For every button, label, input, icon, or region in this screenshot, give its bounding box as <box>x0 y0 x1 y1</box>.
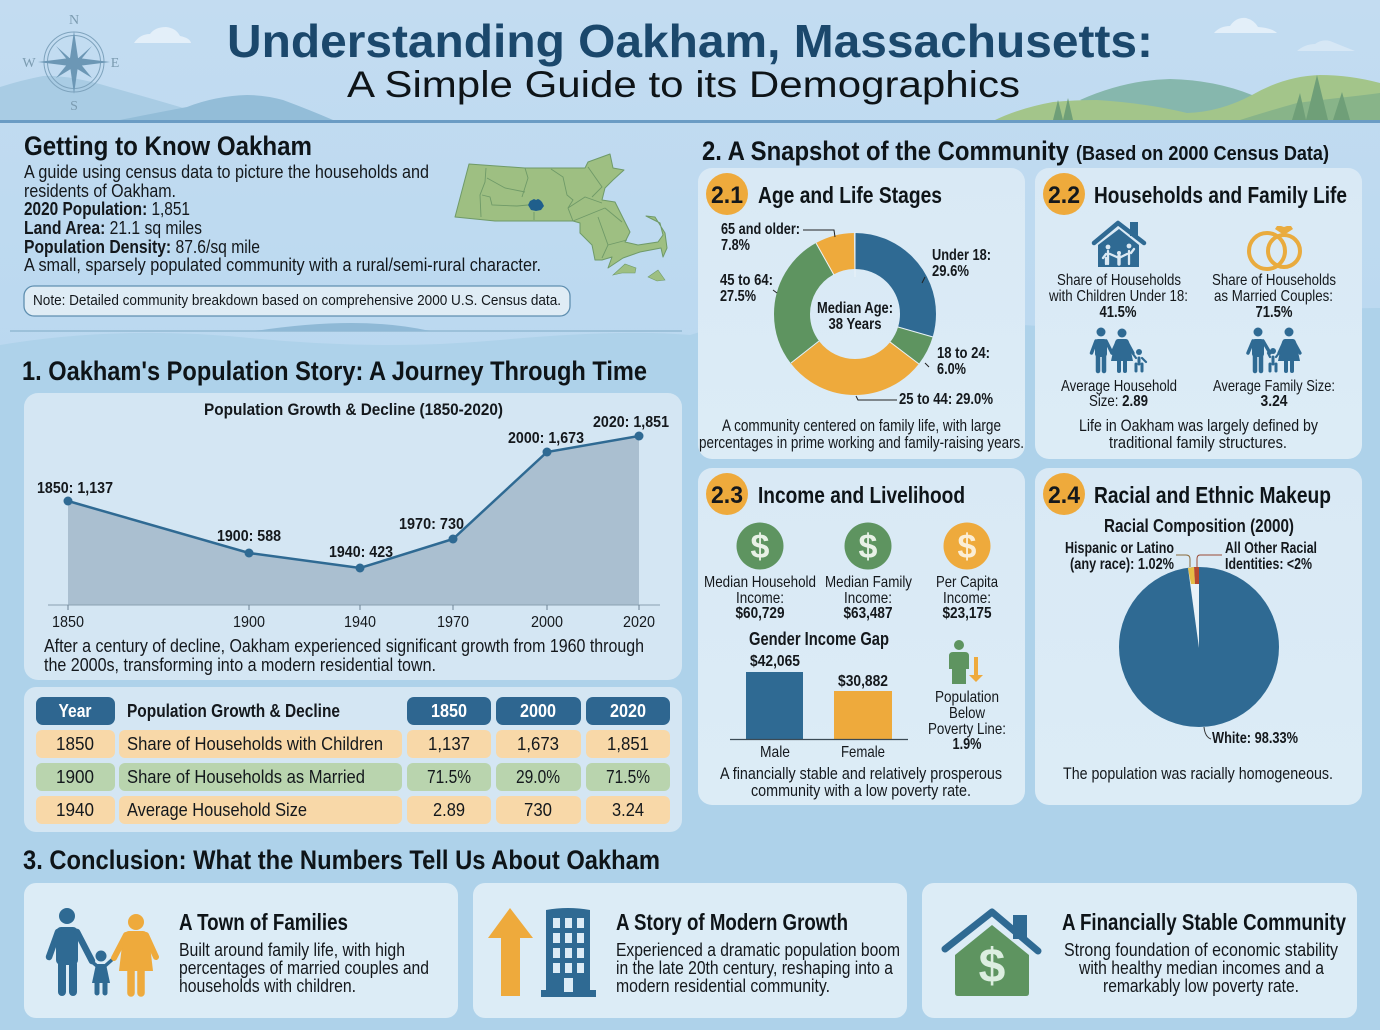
donut chart: age groups: 25 to 44: 29.0% <box>899 391 993 408</box>
area line chart: 2020: 1,851 <box>593 414 669 431</box>
table row 1940 <box>36 796 670 824</box>
badge 2.1 <box>706 173 748 215</box>
bar chart: gender income gap: $42,065 <box>750 653 800 670</box>
icon: compass rose: E <box>111 56 119 71</box>
donut chart: age groups <box>720 221 993 408</box>
badge 2.4: 2.4 <box>1048 482 1081 509</box>
table row 1900: 29.0% <box>516 767 560 787</box>
caption: A community centered on family life, with large <box>722 416 1001 435</box>
donut chart: age groups: 18 to 24: <box>937 345 990 362</box>
note callout: Note: Detailed community breakdown based on comprehensive 2000 U.S. Census data. <box>33 292 561 309</box>
icon: arrow up <box>488 908 533 996</box>
card: a financially stable community <box>922 883 1357 1018</box>
panel 2.3: income and livelihood <box>698 468 1025 805</box>
table row 1850: 1,851 <box>607 734 649 754</box>
section heading: conclusion: 3. Conclusion: What the Numbers Tell Us About Oakham <box>23 845 660 875</box>
panel: getting to know Oakham <box>24 131 667 316</box>
stat: per capita income: Income: <box>943 590 991 607</box>
area line chart: 1900: 588 <box>217 528 281 545</box>
chart caption <box>44 635 644 675</box>
table row 1850: Share of Households with Children <box>127 734 383 754</box>
bar chart: gender income gap: Male <box>760 744 790 761</box>
panel: data table <box>24 687 682 832</box>
icon: building <box>541 908 596 997</box>
pie chart: racial composition: Racial Composition (2000) <box>1104 516 1294 536</box>
table header <box>36 697 670 725</box>
pie chart: racial composition: Identities: <2% <box>1225 556 1312 573</box>
stat: households with children: 41.5% <box>1100 304 1136 321</box>
chart caption: the 2000s, transforming into a modern residential town. <box>44 654 436 675</box>
text block: overview: 2020 Population: 1,851 <box>24 198 190 219</box>
table row 1900 <box>36 763 670 791</box>
caption: The population was racially homogeneous. <box>1063 764 1333 783</box>
icon: compass rose: W <box>22 56 36 71</box>
table header: 2020 <box>610 701 646 721</box>
stat: per capita income <box>936 522 998 622</box>
table row 1940: Average Household Size <box>127 800 307 820</box>
stat: median family income: $63,487 <box>844 605 893 622</box>
area line chart: 2000: 1,673 <box>508 430 584 447</box>
donut chart: age groups: 45 to 64: <box>720 272 773 289</box>
stat: household size <box>1061 378 1177 410</box>
text block: Built around family life, with high <box>179 940 405 960</box>
text block: overview: Population Density: 87.6/sq mile <box>24 236 260 257</box>
table header: 1850 <box>431 701 467 721</box>
donut chart: age groups: 65 and older: <box>721 221 800 238</box>
stat: median family income <box>825 522 912 622</box>
caption: Life in Oakham was largely defined by <box>1079 416 1318 435</box>
table header: 2000 <box>520 701 556 721</box>
donut chart: age groups: Median Age: <box>817 300 893 317</box>
caption: percentages in prime working and family-raising years. <box>699 433 1024 452</box>
area line chart <box>37 414 669 631</box>
stat: median household income: Median Household <box>704 574 816 591</box>
badge 2.1: 2.1 <box>711 182 743 209</box>
badge 2.4 <box>1043 473 1085 515</box>
heading: A Story of Modern Growth <box>616 909 848 935</box>
text block: with healthy median incomes and a <box>1078 958 1325 978</box>
icon: compass rose <box>22 13 119 114</box>
caption: A financially stable and relatively prosperous <box>720 764 1002 783</box>
stat: households with children: with Children Under 18: <box>1048 288 1188 305</box>
note callout <box>24 286 570 316</box>
bar chart: gender income gap <box>730 629 908 761</box>
table row 1900: 1900 <box>56 767 94 787</box>
stat: poverty line: 1.9% <box>952 736 982 753</box>
bar chart: gender income gap: Gender Income Gap <box>749 629 889 649</box>
section heading: population story: 1. Oakham's Population Story: A Journey Through Time <box>22 356 647 386</box>
section heading: snapshot: (Based on 2000 Census Data) <box>1076 143 1329 165</box>
donut chart: age groups: 38 Years <box>828 316 882 333</box>
stat: family size: 3.24 <box>1260 393 1288 410</box>
badge 2.3 <box>706 473 748 515</box>
table row 1900: 71.5% <box>606 767 650 787</box>
stat: median household income: Income: <box>736 590 784 607</box>
table row 1940: 2.89 <box>433 800 465 820</box>
section heading: snapshot <box>702 136 1329 166</box>
stat: married couples: 71.5% <box>1256 304 1292 321</box>
area line chart: 2020 <box>623 614 655 631</box>
text block: overview <box>24 161 541 275</box>
donut chart: age groups: 7.8% <box>721 237 750 254</box>
caption: community with a low poverty rate. <box>751 781 971 800</box>
stat: median family income: Median Family <box>825 574 912 591</box>
area line chart: 1850: 1,137 <box>37 480 113 497</box>
badge 2.3: 2.3 <box>711 482 743 509</box>
stat: married couples: as Married Couples: <box>1214 288 1333 305</box>
stat: households with children <box>1048 272 1188 321</box>
panel 2.2: households and family life <box>1035 168 1362 459</box>
text block <box>616 940 900 996</box>
hills right <box>995 75 1380 120</box>
pie chart: racial composition: Hispanic or Latino <box>1065 540 1174 557</box>
icon: family of three <box>1092 328 1146 371</box>
text block: Strong foundation of economic stability <box>1064 940 1338 960</box>
header banner <box>0 18 1380 123</box>
text block: percentages of married couples and <box>179 958 429 978</box>
pie chart: racial composition: All Other Racial <box>1225 540 1317 557</box>
area line chart: 1940 <box>344 614 376 631</box>
stat: married couples <box>1212 272 1336 321</box>
donut chart: age groups: 29.6% <box>932 263 969 280</box>
caption: traditional family structures. <box>1109 433 1287 452</box>
text block <box>1064 940 1338 996</box>
table row 1940: 1940 <box>56 800 94 820</box>
stat: family size: Average Family Size: <box>1213 378 1335 395</box>
mountains left <box>0 76 333 120</box>
icon: house with family <box>1094 222 1144 267</box>
stat: married couples: Share of Households <box>1212 272 1336 289</box>
panel 2.4: racial and ethnic makeup <box>1035 468 1362 805</box>
text block <box>179 940 429 996</box>
area line chart: 1970: 730 <box>399 516 464 533</box>
icon: house with dollar: $ <box>979 940 1006 993</box>
card: a town of families <box>24 883 458 1018</box>
stat: family size <box>1213 378 1335 410</box>
map: Massachusetts <box>455 154 667 281</box>
title: Understanding Oakham, Massachusetts: <box>227 15 1153 67</box>
icon: wedding rings <box>1249 226 1300 269</box>
stat: median household income: $60,729 <box>736 605 785 622</box>
table row 1940: 730 <box>524 800 552 820</box>
bar chart: gender income gap: $30,882 <box>838 673 888 690</box>
badge 2.2 <box>1043 173 1085 215</box>
pie chart: racial composition <box>1065 516 1317 747</box>
table row 1850: 1850 <box>56 734 94 754</box>
text block: remarkably low poverty rate. <box>1103 976 1299 996</box>
donut chart: age groups: Under 18: <box>932 247 991 264</box>
panel: population line chart <box>24 393 682 680</box>
table header: Population Growth & Decline <box>127 701 340 721</box>
stat: median family income: Income: <box>844 590 892 607</box>
text block: in the late 20th century, reshaping into a <box>616 958 894 978</box>
stat: median household income: $ <box>751 528 770 566</box>
heading: A Town of Families <box>179 909 348 935</box>
table row 1900: 71.5% <box>427 767 471 787</box>
icon: compass rose: N <box>69 13 79 28</box>
clouds <box>134 18 1355 51</box>
stat: median household income <box>704 522 816 622</box>
text block: overview: residents of Oakham. <box>24 180 176 201</box>
text block: households with children. <box>179 976 356 996</box>
stat: household size: Size: 2.89 <box>1089 393 1148 410</box>
area line chart: 1900 <box>233 614 265 631</box>
heading: Age and Life Stages <box>758 182 942 208</box>
donut chart: age groups: 27.5% <box>720 288 756 305</box>
stat: poverty line: Population <box>935 689 999 706</box>
caption <box>699 416 1024 452</box>
text block: overview: A guide using census data to picture the households and <box>24 161 429 182</box>
title: A Simple Guide to its Demographics <box>347 64 1020 105</box>
table row 1850: 1,673 <box>517 734 559 754</box>
donut chart: age groups: 6.0% <box>937 361 966 378</box>
pie chart: racial composition: White: 98.33% <box>1212 730 1298 747</box>
text block: Experienced a dramatic population boom <box>616 940 900 960</box>
badge 2.2: 2.2 <box>1048 182 1080 209</box>
card: a story of modern growth <box>473 883 907 1018</box>
chart caption: After a century of decline, Oakham experienced significant growth from 1960 through <box>44 635 644 656</box>
pie chart: racial composition: (any race): 1.02% <box>1070 556 1174 573</box>
table header: Year <box>58 701 92 721</box>
text block: overview: A small, sparsely populated community with a rural/semi-rural character. <box>24 254 541 275</box>
heading: Getting to Know Oakham <box>24 131 312 161</box>
caption <box>1079 416 1318 452</box>
caption <box>720 764 1002 800</box>
stat: households with children: Share of Households <box>1057 272 1181 289</box>
icon: house with dollar <box>945 912 1038 996</box>
section heading: snapshot: 2. A Snapshot of the Community <box>702 136 1069 166</box>
stat: poverty line: Below <box>949 705 985 722</box>
stat: median family income: $ <box>859 528 878 566</box>
icon: family <box>49 908 156 993</box>
text block: modern residential community. <box>616 976 830 996</box>
stat: household size: Average Household <box>1061 378 1177 395</box>
table row 1900: Share of Households as Married <box>127 767 365 787</box>
panel 2.1: age and life stages <box>698 168 1025 459</box>
stat: per capita income: $23,175 <box>942 605 992 622</box>
stat: per capita income: $ <box>958 528 977 566</box>
area line chart: 2000 <box>531 614 563 631</box>
area line chart: 1850 <box>52 614 84 631</box>
area line chart: 1940: 423 <box>329 544 393 561</box>
chart title: Population Growth & Decline (1850-2020) <box>204 400 503 419</box>
bar chart: gender income gap: Female <box>841 744 885 761</box>
stat: poverty line <box>928 640 1006 753</box>
area line chart: 1970 <box>437 614 469 631</box>
stat: poverty line: Poverty Line: <box>928 721 1006 738</box>
table row 1940: 3.24 <box>612 800 644 820</box>
heading: Income and Livelihood <box>758 482 965 508</box>
icon: family size <box>1248 328 1300 371</box>
icon: compass rose: S <box>70 99 78 114</box>
table row 1850 <box>36 730 670 758</box>
table row 1850: 1,137 <box>428 734 470 754</box>
stat: per capita income: Per Capita <box>936 574 998 591</box>
text block: overview: Land Area: 21.1 sq miles <box>24 217 202 238</box>
title <box>227 15 1153 105</box>
heading: Racial and Ethnic Makeup <box>1094 482 1331 508</box>
